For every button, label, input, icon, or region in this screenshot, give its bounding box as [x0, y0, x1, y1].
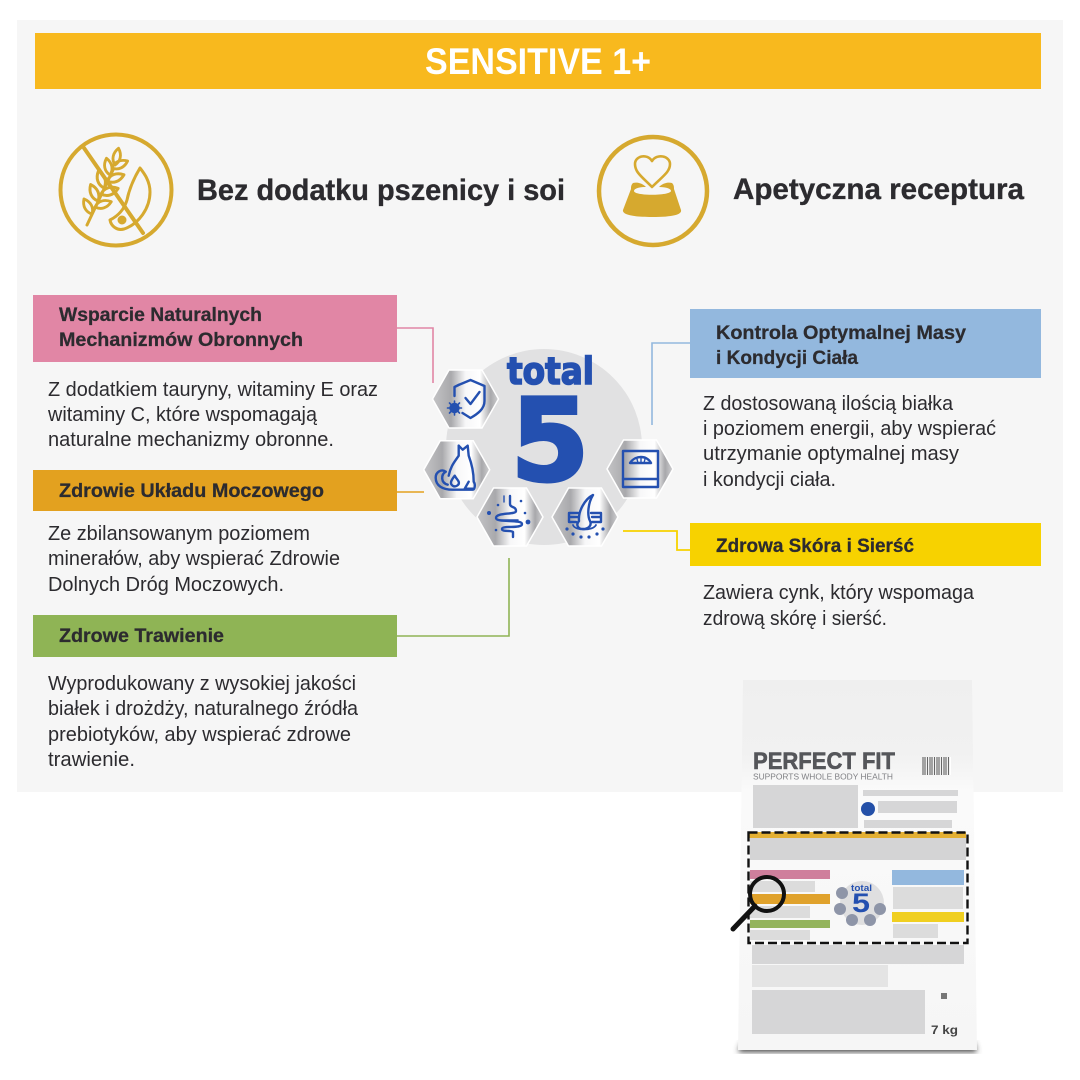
text: urinary health: Ze zbilansowanym poziomem: [48, 522, 310, 545]
text: urinary health: [48, 522, 340, 596]
magnifier: [733, 877, 784, 929]
bag body: [738, 680, 977, 1050]
arrow: green connector: [397, 558, 509, 636]
blue nutrient badge: [861, 802, 875, 816]
text: natural defence: Z dodatkiem tauryny, witaminy E oraz: [48, 378, 378, 401]
mini emblem: total: [851, 883, 872, 893]
arrow: blue connector: [652, 343, 690, 425]
icon: scale: [607, 440, 673, 498]
feeding table: [752, 965, 888, 987]
heading: no wheat and soy: Bez dodatku pszenicy i soi: [197, 174, 565, 207]
panel: weight control: i Kondycji Ciała: [716, 347, 858, 369]
icon: shield: [432, 370, 498, 428]
title: SENSITIVE 1+: [425, 41, 651, 82]
lower text blocks: [752, 945, 964, 1034]
icon: no wheat and soy: [60, 134, 172, 246]
text: skin and coat: zdrową skórę i sierść.: [703, 607, 887, 630]
text: digestion: Wyprodukowany z wysokiej jakości: [48, 672, 356, 695]
text: digestion: [48, 672, 359, 771]
barcode: [922, 757, 951, 775]
heading: digestion: Zdrowe Trawienie: [59, 625, 224, 647]
panel: urinary health: [33, 470, 397, 511]
icon: hair and skin: [552, 488, 618, 546]
back text blocks: [753, 785, 958, 828]
text: skin and coat: Zawiera cynk, który wspomaga: [703, 581, 975, 604]
panel: background: [17, 20, 1063, 792]
heading: appetising recipe: Apetyczna receptura: [733, 173, 1025, 206]
text: digestion: trawienie.: [48, 748, 135, 771]
product bag: [733, 680, 977, 1052]
heading: urinary health: Zdrowie Układu Moczowego: [59, 480, 324, 502]
icon: bowl with heart: [599, 137, 707, 245]
text: weight control: Z dostosowaną ilością białka: [703, 392, 954, 415]
text: urinary health: minerałów, aby wspierać Zdrowie: [48, 547, 340, 570]
text: weight control: utrzymanie optymalnej masy: [703, 442, 960, 465]
weight label: 7 kg: [931, 1025, 958, 1037]
chart: total 5 emblem: [424, 349, 673, 546]
text: digestion: prebiotyków, aby wspierać zdrowe: [48, 723, 351, 746]
dashed frame: [748, 832, 968, 943]
small code mark: [941, 993, 947, 999]
icon: cat: [424, 441, 490, 499]
panel: digestion: [33, 615, 397, 657]
heading: skin and coat: Zdrowa Skóra i Sierść: [716, 535, 914, 557]
text: natural defence: [47, 378, 378, 451]
brand name: PERFECT FIT: [753, 748, 895, 775]
text: urinary health: Dolnych Dróg Moczowych.: [48, 573, 284, 596]
arrow: pink connector: [397, 328, 433, 383]
panel: natural defence: Mechanizmów Obronnych: [59, 329, 303, 351]
heading: weight control: Kontrola Optymalnej Masy: [716, 322, 966, 344]
arrow: yellow connector: [623, 531, 690, 550]
panel: skin and coat: [690, 523, 1041, 566]
text: weight control: i kondycji ciała.: [703, 468, 836, 491]
panel: weight control: [690, 309, 1041, 378]
panel: natural defence: [33, 295, 397, 362]
text: weight control: i poziomem energii, aby wspierać: [703, 417, 996, 440]
text: natural defence: witaminy C, które wspomagają: [47, 403, 318, 426]
heading: natural defence: Wsparcie Naturalnych: [59, 304, 262, 326]
text: digestion: białek i drożdży, naturalnego źródła: [48, 697, 359, 720]
bag shadow: [738, 1042, 977, 1052]
text: skin and coat: [703, 581, 975, 630]
text: weight control: [703, 392, 996, 491]
mini emblem: 5: [852, 888, 870, 918]
header bar: [35, 33, 1041, 89]
big number 5: 5: [511, 375, 589, 507]
brand tagline: SUPPORTS WHOLE BODY HEALTH: [753, 772, 893, 782]
mini info section: [748, 832, 966, 940]
arrow: orange connector: [397, 491, 424, 493]
icon: intestine: [477, 488, 543, 546]
text: natural defence: naturalne mechanizmy obronne.: [48, 428, 334, 451]
mini emblem: [834, 881, 886, 926]
total label: total: [507, 350, 594, 393]
